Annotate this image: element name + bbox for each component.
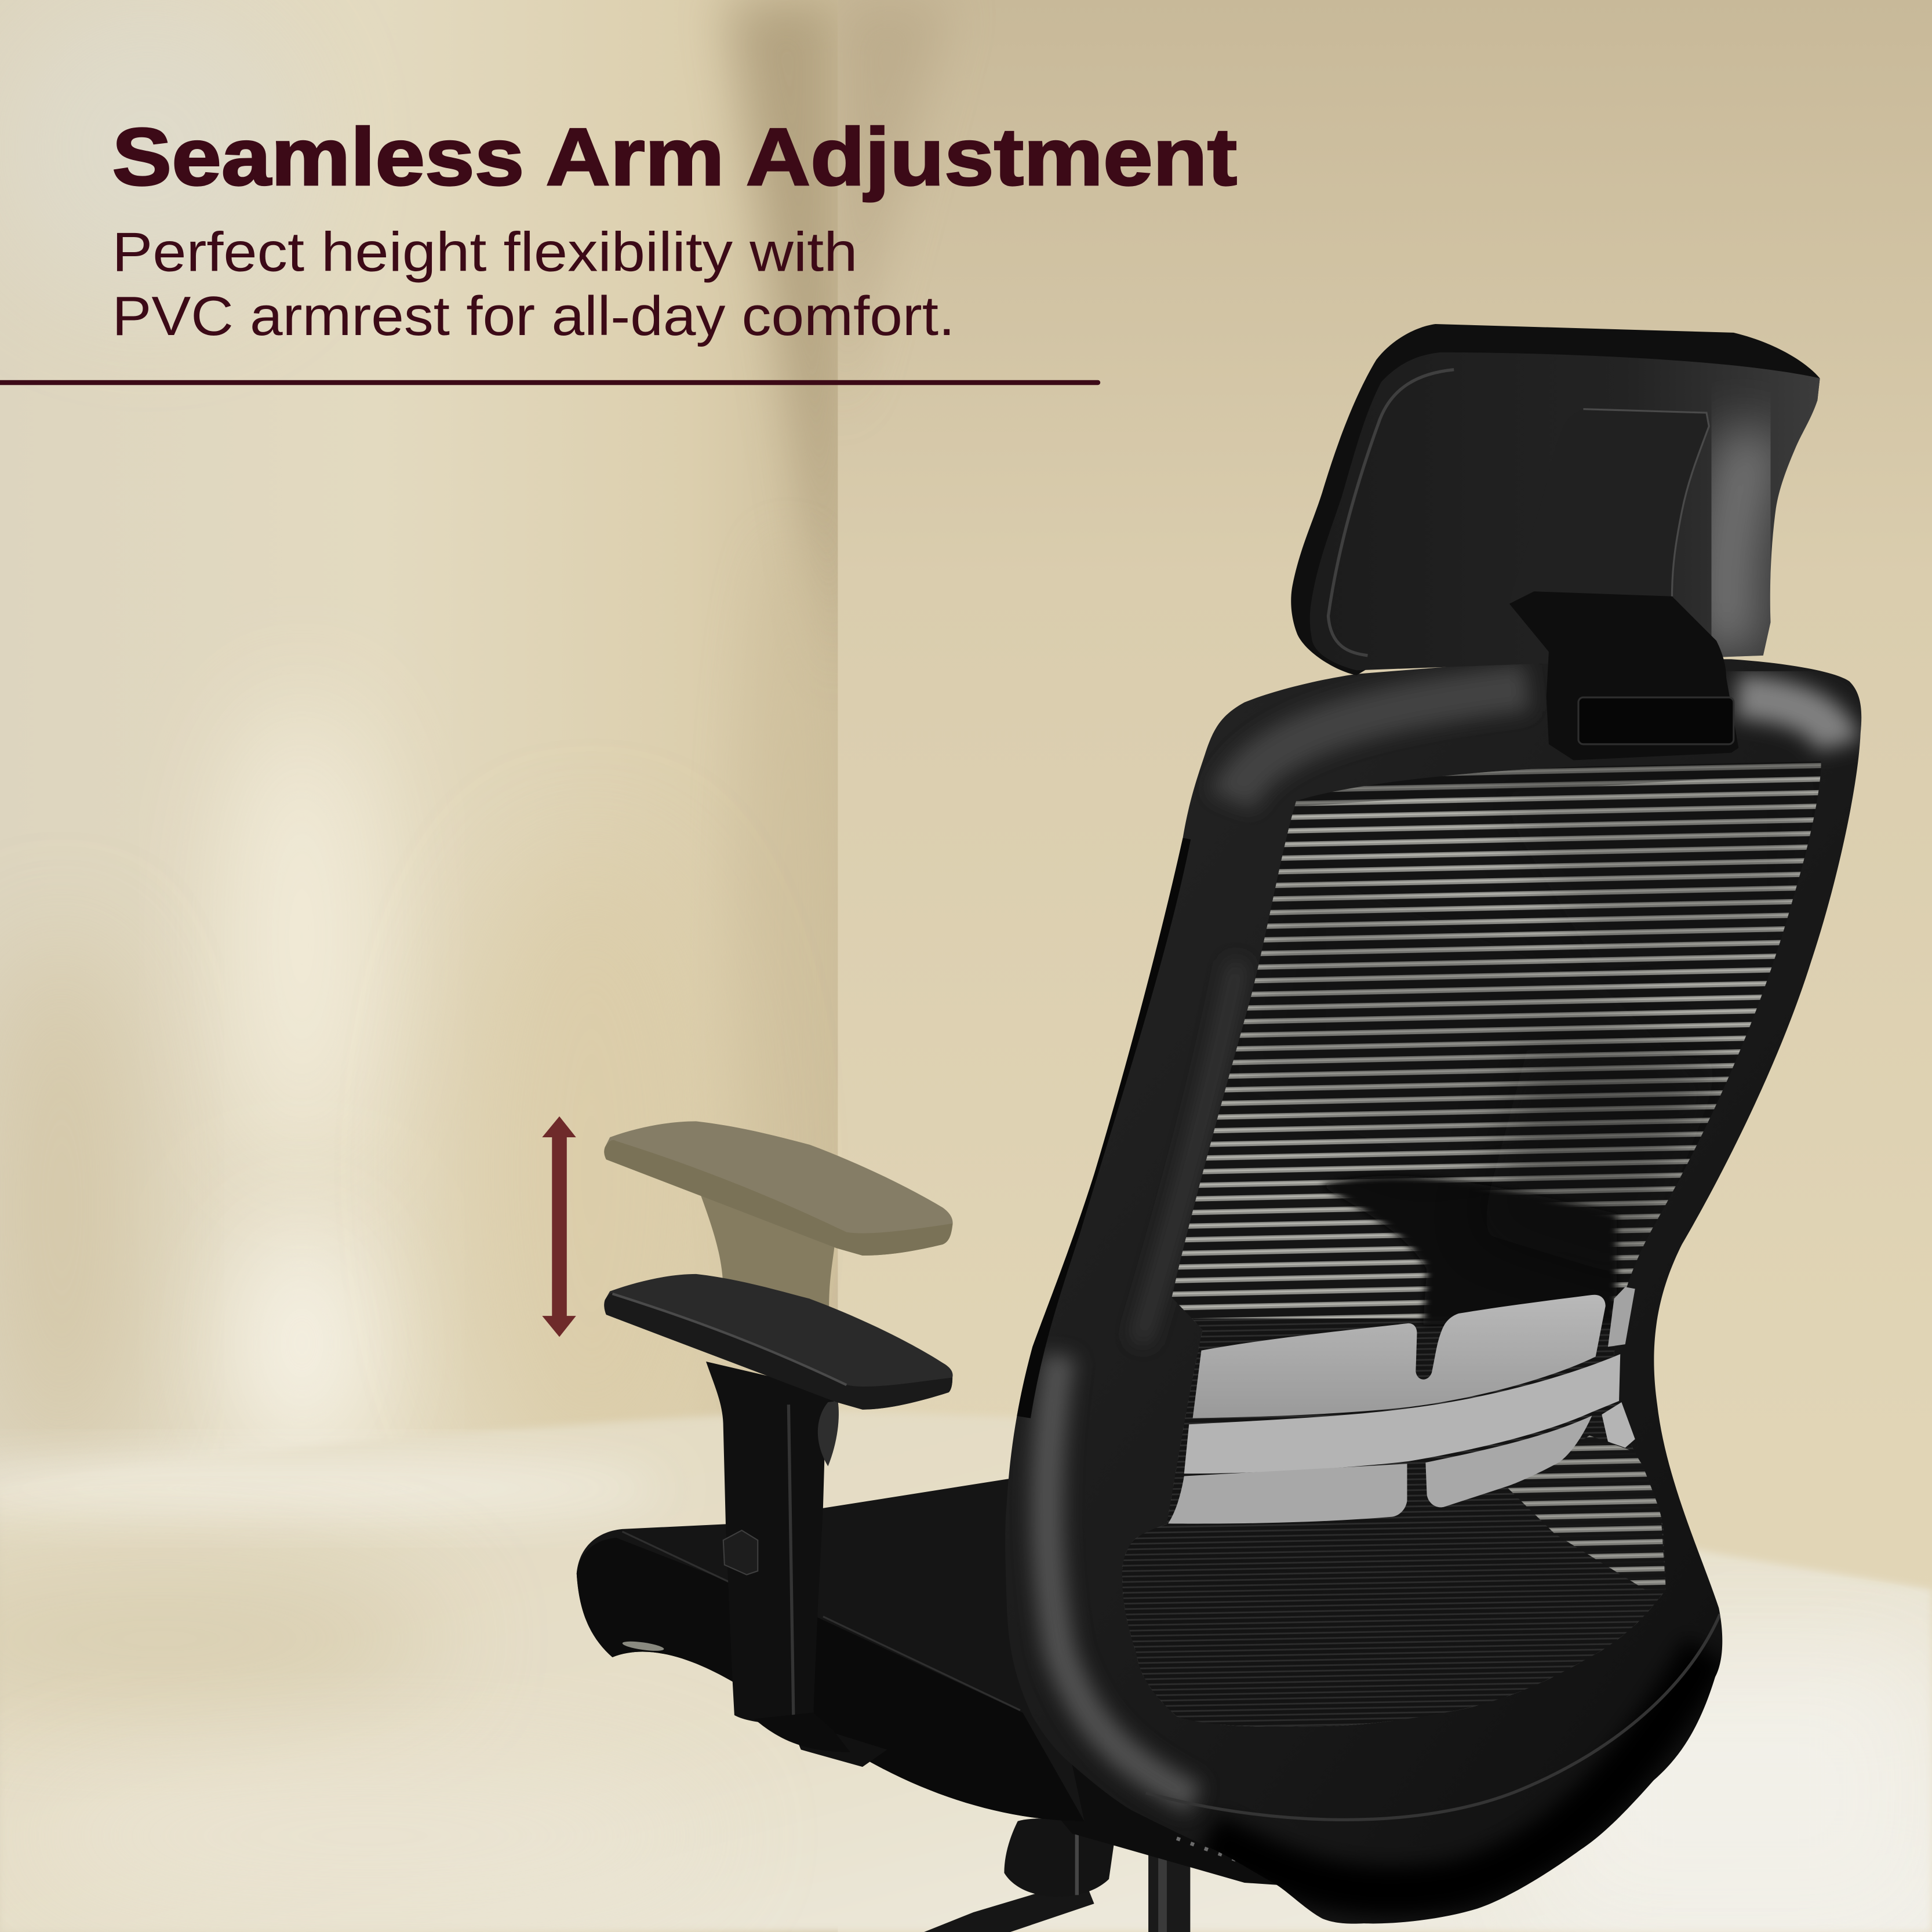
lower lumbar bracket <box>1602 1402 1635 1448</box>
lumbar support <box>1168 1287 1635 1524</box>
subtitle text: PVC armrest for all-day comfort. <box>112 285 955 347</box>
bracket release tab <box>1578 697 1734 744</box>
lumbar cross band <box>1184 1354 1620 1473</box>
headrest <box>1291 324 1820 761</box>
shell highlights <box>1023 687 1838 1891</box>
arrow: up and down height adjustment <box>542 1116 576 1337</box>
plate highlights <box>1328 370 1756 656</box>
ghost armrest: raised position <box>604 1121 953 1318</box>
seat cushion <box>577 1479 1085 1821</box>
chair backrest <box>1005 659 1861 1924</box>
subtitle text <box>112 221 955 347</box>
upper lumbar plate <box>1193 1295 1606 1418</box>
chair base: cylinder, knob, leg and mechanism <box>924 1725 1282 1932</box>
heading rule <box>0 381 1098 384</box>
upper lumbar bracket <box>1608 1287 1635 1347</box>
armrest pad: current position <box>604 1274 953 1410</box>
title: Seamless Arm Adjustment <box>112 111 1237 202</box>
headrest neck bracket <box>1509 409 1738 761</box>
subtitle text: Perfect height flexibility with <box>112 221 857 283</box>
chair <box>577 324 1861 1932</box>
armrest post <box>706 1362 850 1752</box>
mesh panel <box>1109 739 1848 1737</box>
lower lumbar plate <box>1168 1416 1592 1524</box>
backrest shell <box>1005 659 1861 1924</box>
headrest cushion edge <box>1291 324 1820 675</box>
armrest adjustment button <box>723 1530 758 1575</box>
headrest back plate <box>1310 352 1820 670</box>
